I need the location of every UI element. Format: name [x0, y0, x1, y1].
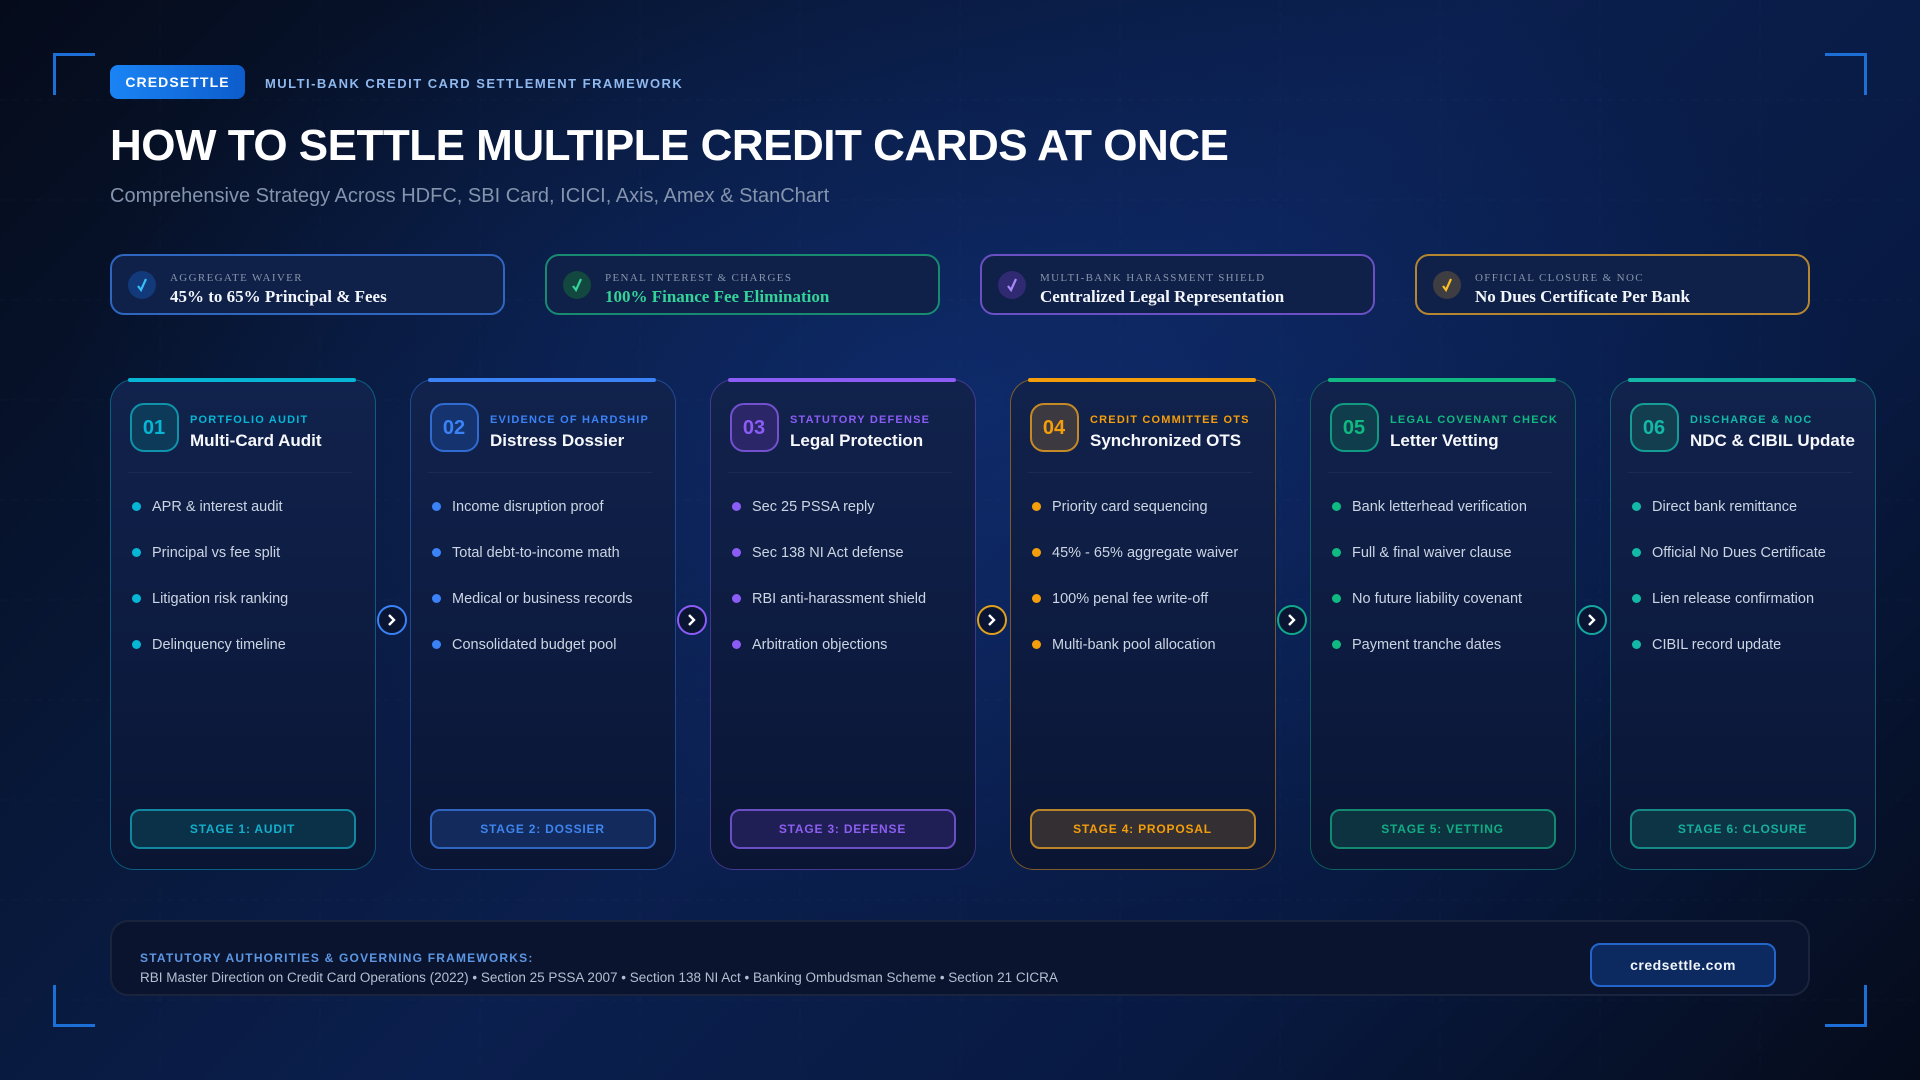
eyebrow: LEGAL COVENANT CHECK	[1390, 414, 1558, 426]
brand badge: CREDSETTLE	[125, 74, 230, 90]
list item: 100% penal fee write-off	[1052, 591, 1208, 607]
corner bracket: top left	[53, 53, 95, 95]
arrow: 01 to 02	[377, 605, 407, 635]
accent bar	[728, 378, 956, 382]
stage button: STAGE 4: PROPOSAL	[1073, 822, 1212, 836]
step number: 06	[1643, 417, 1665, 439]
panel: stage 02 evidence of hardship	[410, 379, 676, 870]
step number: 03	[743, 417, 765, 439]
list item: Official No Dues Certificate	[1652, 545, 1826, 561]
list item: Sec 138 NI Act defense	[752, 545, 904, 561]
benefit pill: aggregate waiver	[110, 254, 505, 315]
step number	[1330, 403, 1378, 452]
step number: 02	[443, 417, 465, 439]
list item: Lien release confirmation	[1652, 591, 1814, 607]
stage button: STAGE 3: DEFENSE	[779, 822, 906, 836]
eyebrow: STATUTORY DEFENSE	[790, 414, 930, 426]
pill label: PENAL INTEREST & CHARGES	[605, 272, 792, 284]
panel: stage 01 portfolio audit	[110, 379, 376, 870]
eyebrow: EVIDENCE OF HARDSHIP	[490, 414, 649, 426]
accent bar	[128, 378, 356, 382]
panel: stage 04 credit committee OTS	[1010, 379, 1276, 870]
corner bracket: bottom left	[53, 985, 95, 1027]
pill label: AGGREGATE WAIVER	[170, 272, 303, 284]
title: HOW TO SETTLE MULTIPLE CREDIT CARDS AT ONCE	[110, 121, 1228, 170]
panel: footer frameworks	[110, 920, 1810, 996]
accent bar	[1028, 378, 1256, 382]
corner bracket: bottom right	[1825, 985, 1867, 1027]
website button	[1590, 943, 1776, 987]
list item: 45% - 65% aggregate waiver	[1052, 545, 1238, 561]
stage button	[430, 809, 656, 849]
benefit pill: closure and NOC	[1415, 254, 1810, 315]
accent bar	[1628, 378, 1856, 382]
arrow: 02 to 03	[677, 605, 707, 635]
list item: No future liability covenant	[1352, 591, 1522, 607]
step number: 05	[1343, 417, 1365, 439]
card title: Legal Protection	[790, 431, 923, 450]
list item: Principal vs fee split	[152, 545, 280, 561]
footer text: RBI Master Direction on Credit Card Operations (2022) • Section 25 PSSA 2007 • Section 138 NI Act • Banking Ombudsman Scheme • Section 21 CICRA	[140, 970, 1058, 985]
icon: check green	[563, 271, 591, 299]
arrow: 05 to 06	[1577, 605, 1607, 635]
step number: 01	[143, 417, 165, 439]
stage button	[1030, 809, 1256, 849]
stage button	[1330, 809, 1556, 849]
list item: Multi-bank pool allocation	[1052, 637, 1216, 653]
step number	[130, 403, 178, 452]
accent bar	[1328, 378, 1556, 382]
list item: Litigation risk ranking	[152, 591, 288, 607]
brand badge	[110, 65, 245, 99]
icon: check purple	[998, 271, 1026, 299]
stage button	[130, 809, 356, 849]
list item: Direct bank remittance	[1652, 499, 1797, 515]
subtitle: Comprehensive Strategy Across HDFC, SBI Card, ICICI, Axis, Amex & StanChart	[110, 185, 829, 207]
list item: RBI anti-harassment shield	[752, 591, 926, 607]
pill value: Centralized Legal Representation	[1040, 287, 1284, 306]
stage button	[730, 809, 956, 849]
eyebrow: PORTFOLIO AUDIT	[190, 414, 308, 426]
list item: Medical or business records	[452, 591, 633, 607]
step number	[1630, 403, 1678, 452]
list item: Delinquency timeline	[152, 637, 286, 653]
list item: Full & final waiver clause	[1352, 545, 1512, 561]
panel: stage 05 legal covenant check	[1310, 379, 1576, 870]
accent bar	[428, 378, 656, 382]
list item: Bank letterhead verification	[1352, 499, 1527, 515]
framework label: MULTI-BANK CREDIT CARD SETTLEMENT FRAMEWORK	[265, 76, 683, 91]
eyebrow: CREDIT COMMITTEE OTS	[1090, 414, 1250, 426]
step number: 04	[1043, 417, 1065, 439]
card title: Letter Vetting	[1390, 431, 1499, 450]
step number	[430, 403, 478, 452]
stage button: STAGE 1: AUDIT	[190, 822, 295, 836]
arrow: 04 to 05	[1277, 605, 1307, 635]
corner bracket: top right	[1825, 53, 1867, 95]
list item: Income disruption proof	[452, 499, 604, 515]
stage button: STAGE 5: VETTING	[1381, 822, 1504, 836]
step number	[730, 403, 778, 452]
eyebrow: DISCHARGE & NOC	[1690, 414, 1813, 426]
pill value: 100% Finance Fee Elimination	[605, 287, 829, 306]
pill value: No Dues Certificate Per Bank	[1475, 287, 1690, 306]
list item: Total debt-to-income math	[452, 545, 620, 561]
pill label: OFFICIAL CLOSURE & NOC	[1475, 272, 1644, 284]
stage button: STAGE 6: CLOSURE	[1678, 822, 1807, 836]
pill value: 45% to 65% Principal & Fees	[170, 287, 387, 306]
icon: check amber	[1433, 271, 1461, 299]
benefit pill: penal interest	[545, 254, 940, 315]
benefit pill: harassment shield	[980, 254, 1375, 315]
stage button: STAGE 2: DOSSIER	[480, 822, 605, 836]
card title: Distress Dossier	[490, 431, 624, 450]
card title: Multi-Card Audit	[190, 431, 322, 450]
list item: Consolidated budget pool	[452, 637, 616, 653]
card title: Synchronized OTS	[1090, 431, 1241, 450]
website button: credsettle.com	[1630, 957, 1736, 973]
panel: stage 03 statutory defense	[710, 379, 976, 870]
icon: check blue	[128, 271, 156, 299]
panel: stage 06 discharge and NOC	[1610, 379, 1876, 870]
pill label: MULTI-BANK HARASSMENT SHIELD	[1040, 272, 1265, 284]
footer heading: STATUTORY AUTHORITIES & GOVERNING FRAMEWORKS:	[140, 951, 534, 965]
stage button	[1630, 809, 1856, 849]
card title: NDC & CIBIL Update	[1690, 431, 1855, 450]
list item: Priority card sequencing	[1052, 499, 1208, 515]
list item: CIBIL record update	[1652, 637, 1781, 653]
arrow: 03 to 04	[977, 605, 1007, 635]
list item: Sec 25 PSSA reply	[752, 499, 875, 515]
list item: APR & interest audit	[152, 499, 283, 515]
list item: Arbitration objections	[752, 637, 887, 653]
step number	[1030, 403, 1078, 452]
list item: Payment tranche dates	[1352, 637, 1501, 653]
